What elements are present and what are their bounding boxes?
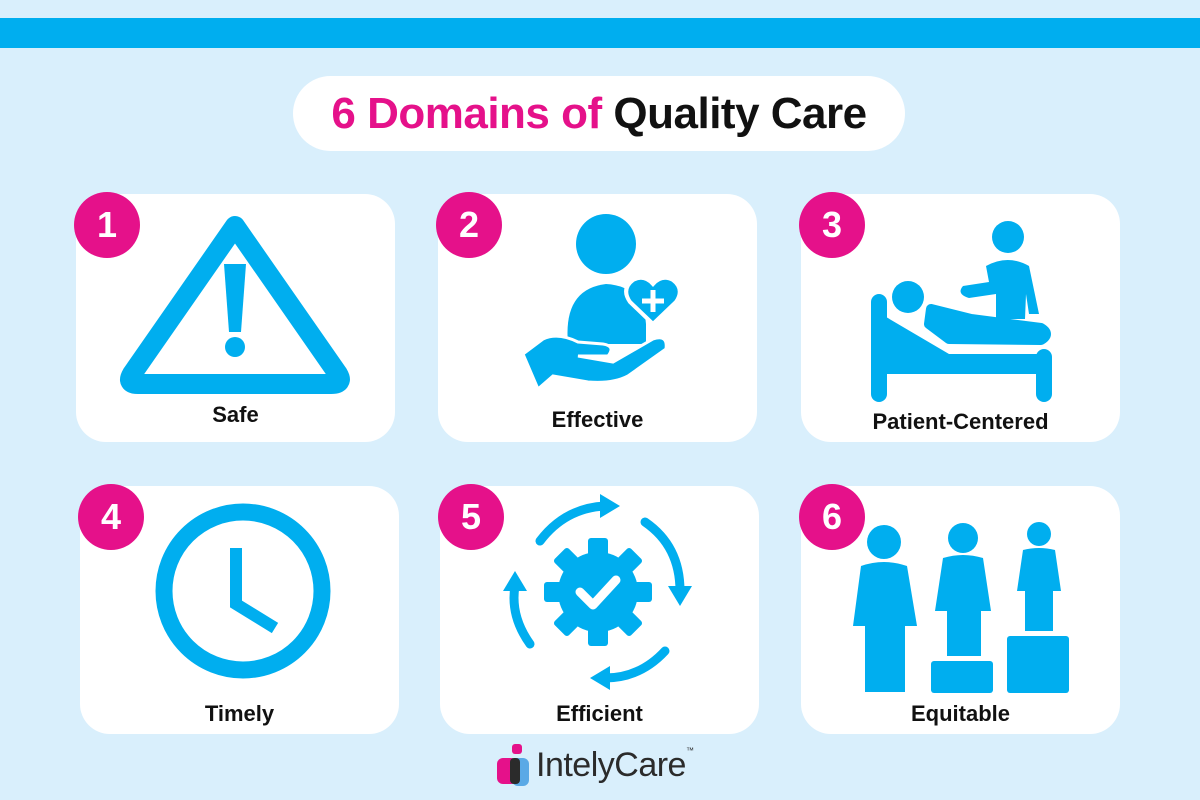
icon: person with heart in hand	[524, 214, 678, 386]
icon: gear with check and arrows	[503, 494, 692, 690]
icon: warning triangle	[120, 216, 350, 394]
icon: patient in bed with doctor	[871, 221, 1052, 402]
panel: effective	[438, 194, 757, 442]
badge 6: 6	[822, 496, 842, 537]
panel: equitable	[801, 486, 1120, 734]
badge 1	[74, 192, 140, 258]
label: Efficient	[556, 701, 643, 726]
badge 3: 3	[822, 204, 842, 245]
panel: safe	[76, 194, 395, 442]
logo: IntelyCare: IntelyCare™	[536, 746, 693, 784]
badge 4	[78, 484, 144, 550]
badge 3	[799, 192, 865, 258]
panel: efficient	[440, 486, 759, 734]
badge 1: 1	[97, 204, 117, 245]
icon: three people on boxes	[853, 522, 1069, 693]
badge 2	[436, 192, 502, 258]
label: Safe	[212, 402, 259, 427]
badge 5	[438, 484, 504, 550]
title	[293, 76, 905, 151]
badge 5: 5	[461, 496, 481, 537]
label: Effective	[552, 407, 643, 432]
panel: timely	[80, 486, 399, 734]
panel: patient-centered	[801, 194, 1120, 442]
title: 6 Domains of Quality Care	[331, 89, 867, 138]
label: Patient-Centered	[872, 409, 1049, 434]
badge 6	[799, 484, 865, 550]
badge 4: 4	[101, 496, 121, 537]
label: Timely	[205, 701, 274, 726]
icon: clock	[156, 504, 330, 678]
label: Equitable	[911, 701, 1010, 726]
badge 2: 2	[459, 204, 479, 245]
